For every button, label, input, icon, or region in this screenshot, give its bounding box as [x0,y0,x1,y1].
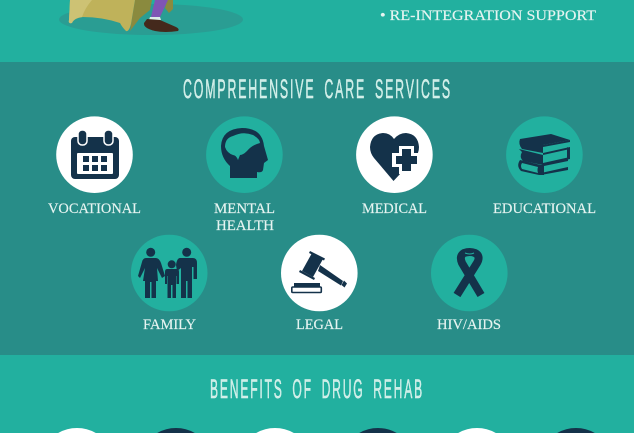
panel: benefits of drug rehab [0,355,634,433]
service: medical [356,116,433,217]
label: educational: EDUCATIONAL [493,201,596,217]
label: mental health: MENTAL [214,201,275,217]
icon: family [138,248,197,298]
panel: comprehensive care services [0,62,634,355]
illustration: armchair and foot [59,0,243,35]
service: educational [493,116,596,217]
service: legal [281,235,358,333]
service: family [131,235,208,333]
label: hiv/aids: HIV/AIDS [437,317,501,333]
label: medical: MEDICAL [362,201,427,217]
service: hiv/aids [431,235,508,333]
label: mental health [214,201,275,234]
icon: awareness ribbon [457,252,481,295]
label: legal: LEGAL [296,317,343,333]
icon: gavel [292,251,347,292]
label: vocational: VOCATIONAL [48,201,141,217]
service: vocational [48,116,141,217]
text: re-integration support: • RE-INTEGRATION SUPPORT [380,8,596,24]
icon: stack of books [518,134,570,175]
label: family: FAMILY [143,317,196,333]
icon: head with brain [221,128,268,178]
icon: calendar [71,130,119,179]
service: mental health [206,116,283,234]
panel: top section [0,0,634,62]
row of benefit circles [58,428,595,433]
icon: heart with plus [370,133,419,181]
label: mental health: HEALTH [216,218,274,234]
